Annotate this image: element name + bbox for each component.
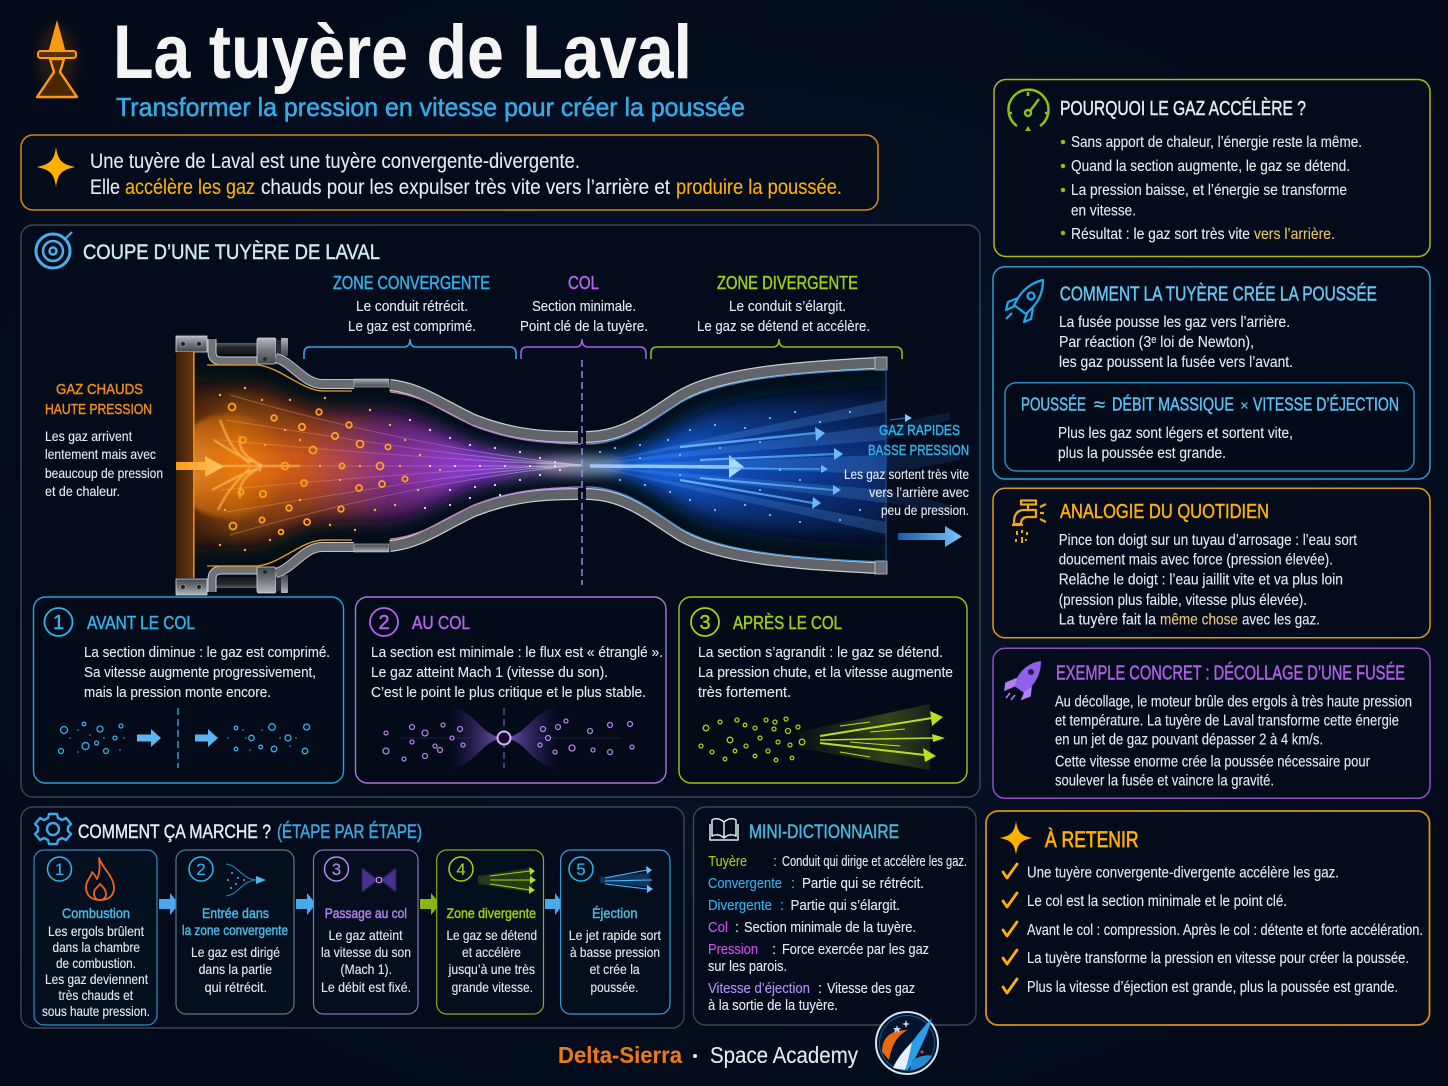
step 4: 4 bbox=[456, 860, 466, 879]
icon: book bbox=[710, 819, 738, 840]
panel: comment ca marche: (ÉTAPE PAR ÉTAPE) bbox=[277, 822, 422, 843]
card: avant le col: La section diminue : le gaz est comprimé. bbox=[84, 644, 330, 661]
panel: mini dictionnaire: Force exercée par les gaz bbox=[782, 942, 929, 958]
step 2: 2 bbox=[196, 860, 206, 879]
icon: flame bbox=[86, 858, 114, 900]
arrow: step 1 to 2 bbox=[159, 893, 179, 915]
footer brand bbox=[558, 1042, 858, 1068]
step 3: 3 bbox=[332, 860, 341, 879]
panel: mini dictionnaire: : bbox=[818, 981, 822, 997]
intro callout: Une tuyère de Laval est une tuyère convergente-divergente. bbox=[90, 150, 580, 173]
subtitle: Transformer la pression en vitesse pour créer la poussée bbox=[116, 92, 745, 122]
label: gaz chauds: HAUTE PRESSION bbox=[45, 401, 152, 418]
step 5: et crée la bbox=[590, 961, 640, 977]
panel: comment ca marche bbox=[21, 807, 684, 1028]
panel: exemple concret bbox=[993, 648, 1430, 798]
step 4: jusqu’à une très bbox=[448, 961, 535, 977]
step 1: Combustion bbox=[62, 905, 130, 921]
card: avant le col bbox=[34, 597, 344, 783]
panel: mini dictionnaire: : bbox=[772, 942, 776, 958]
step 1: Les gaz deviennent bbox=[45, 971, 148, 987]
label: zone divergente: Le conduit s’élargit. bbox=[729, 298, 846, 315]
formula box bbox=[1005, 383, 1414, 471]
panel: comment la tuyere cree la poussee bbox=[993, 267, 1430, 479]
step 3 bbox=[314, 850, 418, 1014]
illustration: expansion bbox=[699, 704, 945, 770]
icon: rocket outline bbox=[1006, 280, 1043, 322]
step 2: Entrée dans bbox=[202, 905, 269, 921]
card: avant le col: AVANT LE COL bbox=[87, 613, 195, 633]
hot particles bbox=[228, 404, 408, 534]
panel: mini dictionnaire: Vitesse d’éjection bbox=[708, 981, 810, 997]
step 1: dans la chambre bbox=[52, 939, 140, 955]
panel: mini dictionnaire: Divergente bbox=[708, 898, 772, 914]
label: gaz chauds: Les gaz arrivent bbox=[45, 428, 132, 444]
step 2 bbox=[176, 850, 294, 1014]
checklist: Le col est la section minimale et le point clé. bbox=[1027, 893, 1287, 910]
footer brand: Delta-Sierra bbox=[558, 1042, 682, 1068]
step 1 bbox=[34, 850, 157, 1025]
panel: mini dictionnaire: : bbox=[780, 898, 784, 914]
arrow: outflow bbox=[898, 526, 962, 547]
intro callout: Elle bbox=[90, 176, 120, 199]
panel: mini dictionnaire: Section minimale de la tuyère. bbox=[744, 920, 916, 936]
panel: analogie: ANALOGIE DU QUOTIDIEN bbox=[1060, 501, 1269, 523]
card: au col: La section est minimale : le flux est « étranglé ». bbox=[371, 644, 663, 661]
panel: mini dictionnaire: à la sortie de la tuyère. bbox=[708, 998, 838, 1014]
icon: jet bbox=[600, 866, 653, 893]
card: au col: Le gaz atteint Mach 1 (vitesse du son). bbox=[371, 664, 608, 681]
step 4: Zone divergente bbox=[446, 905, 536, 921]
flow arrows bbox=[590, 414, 912, 509]
step 3: Le gaz atteint bbox=[328, 927, 403, 943]
panel: a retenir bbox=[986, 811, 1430, 1025]
step 4: Le gaz se détend bbox=[446, 927, 537, 943]
icon: star bbox=[1000, 821, 1032, 855]
panel: analogie bbox=[993, 488, 1430, 638]
flame bbox=[206, 420, 300, 510]
label: gaz rapides: peu de pression. bbox=[881, 502, 969, 518]
step 3: la vitesse du son bbox=[321, 944, 411, 960]
panel: pourquoi le gaz accelere: Résultat : le gaz sort très vite bbox=[1071, 226, 1250, 243]
intro callout: chauds pour les expulser très vite vers l’arrière et bbox=[261, 176, 670, 199]
label: zone divergente: ZONE DIVERGENTE bbox=[717, 273, 858, 293]
label: zone convergente: ZONE CONVERGENTE bbox=[333, 273, 490, 293]
card: au col bbox=[356, 597, 666, 783]
checklist bbox=[1003, 864, 1423, 996]
panel: mini dictionnaire: Tuyère bbox=[708, 854, 747, 870]
icon: gauge bbox=[1008, 90, 1049, 131]
arrow: step 4 to 5 bbox=[545, 893, 564, 915]
label: gaz rapides: BASSE PRESSION bbox=[868, 442, 969, 459]
footer brand: Space Academy bbox=[710, 1042, 858, 1068]
step 1: 1 bbox=[55, 860, 64, 879]
panel: coupe: COUPE D’UNE TUYÈRE DE LAVAL bbox=[83, 241, 380, 264]
panel: mini dictionnaire: Pression bbox=[708, 942, 758, 958]
diagram: nozzle cross-section bbox=[170, 336, 960, 595]
icon: throat bbox=[362, 868, 396, 892]
label: gaz rapides bbox=[844, 422, 969, 518]
card: apres le col: La section s’agrandit : le gaz se détend. bbox=[698, 644, 943, 661]
arrow: step 3 to 4 bbox=[420, 893, 440, 915]
wall bbox=[176, 336, 887, 595]
card: au col: 2 bbox=[378, 612, 390, 634]
panel: mini dictionnaire: : bbox=[735, 920, 739, 936]
converging streaks bbox=[215, 395, 582, 535]
formula box: DÉBIT MASSIQUE bbox=[1112, 395, 1234, 415]
label: gaz chauds: beaucoup de pression bbox=[45, 465, 163, 481]
icon: divergent bbox=[478, 867, 536, 894]
step 3: Le débit est fixé. bbox=[321, 979, 411, 995]
step 1: sous haute pression. bbox=[42, 1003, 150, 1019]
gas flow bbox=[170, 360, 888, 572]
panel: mini dictionnaire: Partie qui se rétrécit. bbox=[802, 876, 924, 892]
card: apres le col: 3 bbox=[699, 612, 711, 634]
icon: academy badge bbox=[876, 1012, 938, 1074]
panel: analogie: doucement mais avec force (pression élevée). bbox=[1059, 551, 1333, 568]
card: apres le col: très fortement. bbox=[698, 684, 791, 701]
icon: target bbox=[36, 232, 72, 268]
card: apres le col: APRÈS LE COL bbox=[733, 613, 842, 633]
panel: exemple concret: en un jet de gaz pouvant dépasser 2 à 4 km/s. bbox=[1055, 731, 1323, 748]
card: avant le col: mais la pression monte encore. bbox=[84, 684, 271, 701]
label: gaz rapides: Les gaz sortent très vite bbox=[844, 466, 969, 482]
formula box: × bbox=[1240, 398, 1249, 415]
intro callout: accélère les gaz bbox=[125, 176, 255, 199]
step 4: et accélère bbox=[462, 944, 521, 960]
title: La tuyère de Laval bbox=[113, 10, 692, 95]
icon: intro star bbox=[37, 147, 75, 187]
diverging rays bbox=[585, 400, 886, 534]
panel: analogie: avec les gaz. bbox=[1242, 611, 1320, 628]
card: apres le col bbox=[679, 597, 967, 783]
panel: pourquoi le gaz accelere: Sans apport de chaleur, l’énergie reste la même. bbox=[1071, 134, 1362, 151]
step 5: Le jet rapide sort bbox=[569, 927, 661, 943]
step 3: (Mach 1). bbox=[340, 961, 392, 977]
formula box: VITESSE D’ÉJECTION bbox=[1253, 395, 1399, 415]
label: zone convergente: Le gaz est comprimé. bbox=[348, 318, 476, 335]
panel: pourquoi le gaz accelere: Quand la section augmente, le gaz se détend. bbox=[1071, 158, 1350, 175]
step 4 bbox=[437, 850, 544, 1014]
label: zone convergente bbox=[304, 273, 516, 359]
step 5: 5 bbox=[576, 860, 586, 879]
panel: analogie: Pince ton doigt sur un tuyau d’arrosage : l’eau sort bbox=[1059, 532, 1357, 549]
panel: mini dictionnaire: Conduit qui dirige et accélère les gaz. bbox=[782, 854, 967, 870]
illustration: throat bbox=[383, 705, 634, 771]
checklist: Une tuyère convergente-divergente accélère les gaz. bbox=[1027, 864, 1339, 882]
panel: pourquoi le gaz accelere: vers l’arrière. bbox=[1254, 226, 1335, 243]
icon: tap bbox=[1012, 500, 1046, 543]
panel: analogie: (pression plus faible, vitesse plus élevée). bbox=[1059, 592, 1307, 609]
formula box: plus la poussée est grande. bbox=[1058, 445, 1226, 462]
step 5: Éjection bbox=[592, 905, 638, 921]
label: gaz chauds: et de chaleur. bbox=[45, 483, 120, 499]
panel: coupe bbox=[21, 225, 980, 797]
card: avant le col: 1 bbox=[53, 612, 64, 634]
step 2: Le gaz est dirigé bbox=[191, 944, 280, 960]
panel: comment ca marche: COMMENT ÇA MARCHE ? bbox=[78, 822, 271, 843]
panel: a retenir: À RETENIR bbox=[1045, 827, 1138, 852]
step 1: Les ergols brûlent bbox=[48, 923, 144, 939]
step 2: la zone convergente bbox=[182, 922, 288, 938]
formula box: ≈ bbox=[1094, 395, 1105, 415]
panel: analogie: La tuyère fait la bbox=[1059, 611, 1156, 628]
label: zone divergente: Le gaz se détend et accélère. bbox=[697, 318, 870, 335]
label: gaz chauds: lentement mais avec bbox=[45, 446, 156, 462]
formula box: POUSSÉE bbox=[1021, 395, 1086, 415]
label: gaz rapides: GAZ RAPIDES bbox=[879, 422, 960, 439]
icon: convergent bbox=[226, 864, 266, 896]
icon: nozzle logo bbox=[37, 23, 77, 97]
label: col: Section minimale. bbox=[532, 298, 636, 315]
label: gaz chauds bbox=[45, 381, 163, 499]
icon: purple rocket bbox=[1005, 661, 1041, 700]
panel: mini dictionnaire: Convergente bbox=[708, 876, 782, 892]
panel: mini dictionnaire: sur les parois. bbox=[708, 959, 787, 975]
panel: mini dictionnaire: Col bbox=[708, 920, 728, 936]
panel: exemple concret: soulever la fusée et vaincre la gravité. bbox=[1055, 773, 1274, 790]
panel: mini dictionnaire: Vitesse des gaz bbox=[827, 981, 915, 997]
panel: pourquoi le gaz accelere: La pression baisse, et l’énergie se transforme bbox=[1071, 182, 1347, 199]
card: apres le col: La pression chute, et la vitesse augmente bbox=[698, 664, 953, 681]
panel: pourquoi le gaz accelere: POURQUOI LE GAZ ACCÉLÈRE ? bbox=[1060, 97, 1306, 120]
card: au col: AU COL bbox=[412, 613, 470, 633]
card: avant le col: Sa vitesse augmente progressivement, bbox=[84, 664, 316, 681]
label: gaz rapides: vers l’arrière avec bbox=[869, 484, 969, 500]
panel: mini dictionnaire bbox=[694, 807, 976, 1025]
label: col bbox=[520, 273, 648, 359]
step 3: Passage au col bbox=[325, 905, 407, 921]
intro callout: produire la poussée. bbox=[676, 176, 842, 199]
chamber back wall bbox=[176, 352, 195, 578]
intro callout bbox=[21, 135, 878, 210]
step 5 bbox=[561, 850, 670, 1014]
panel: analogie: même chose bbox=[1160, 611, 1238, 628]
exit glow bbox=[886, 412, 960, 512]
panel: pourquoi le gaz accelere bbox=[994, 80, 1430, 256]
panel: comment la tuyere cree la poussee: Par réaction (3ᵉ loi de Newton), bbox=[1059, 334, 1254, 351]
label: zone divergente bbox=[651, 273, 902, 359]
label: zone convergente: Le conduit rétrécit. bbox=[356, 298, 468, 315]
step 4: grande vitesse. bbox=[452, 979, 533, 995]
panel: mini dictionnaire: MINI-DICTIONNAIRE bbox=[749, 822, 899, 843]
dashed throat axis bbox=[581, 360, 583, 585]
panel: mini dictionnaire: : bbox=[773, 854, 777, 870]
panel: analogie: Relâche le doigt : l’eau jaillit vite et va plus loin bbox=[1059, 572, 1343, 589]
step 5: à basse pression bbox=[570, 944, 660, 960]
label: col: COL bbox=[568, 273, 599, 293]
step 2: qui rétrécit. bbox=[205, 979, 267, 995]
panel: exemple concret: Cette vitesse enorme crée la poussée nécessaire pour bbox=[1055, 754, 1371, 771]
step 1: très chauds et bbox=[58, 987, 133, 1003]
arrow: step 2 to 3 bbox=[296, 893, 316, 915]
step 5: poussée. bbox=[590, 979, 638, 995]
arrow: inflow bbox=[176, 456, 224, 477]
label: col: Point clé de la tuyère. bbox=[520, 318, 648, 335]
illustration: compression bbox=[58, 708, 310, 768]
icon: gear bbox=[35, 814, 71, 844]
panel: pourquoi le gaz accelere: en vitesse. bbox=[1071, 202, 1136, 220]
step 2: dans la partie bbox=[199, 961, 272, 977]
step 1: de combustion. bbox=[56, 955, 136, 971]
panel: mini dictionnaire: Partie qui s’élargit. bbox=[790, 898, 900, 914]
panel: mini dictionnaire: : bbox=[791, 876, 795, 892]
panel: comment la tuyere cree la poussee: les gaz poussent la fusée vers l’avant. bbox=[1059, 354, 1293, 371]
panel: comment la tuyere cree la poussee: La fusée pousse les gaz vers l’arrière. bbox=[1059, 314, 1290, 331]
card: au col: C’est le point le plus critique et le plus stable. bbox=[371, 684, 646, 701]
formula box: Plus les gaz sont légers et sortent vite, bbox=[1058, 425, 1293, 442]
label: gaz chauds: GAZ CHAUDS bbox=[56, 381, 143, 398]
